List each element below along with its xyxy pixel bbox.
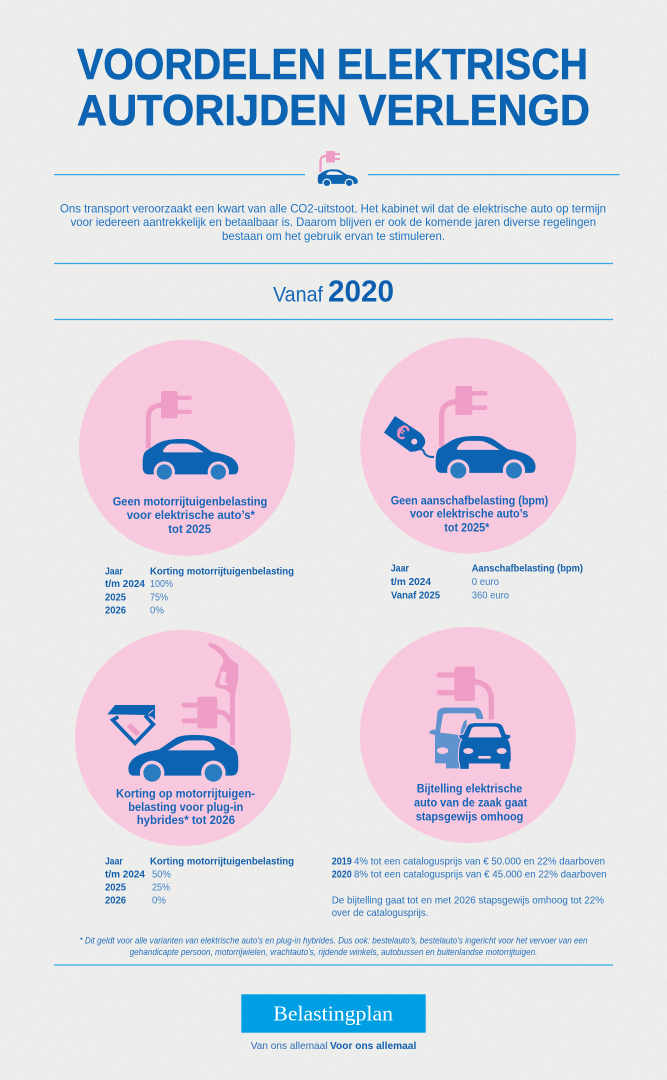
footnote [54, 935, 613, 965]
table: korting motorrijtuigenbelasting: 75% [150, 592, 168, 604]
table: korting motorrijtuigenbelasting [105, 565, 294, 616]
table: korting plug-in hybrides: t/m 2024 [105, 868, 145, 880]
icon: euro price tag [384, 416, 434, 457]
circle heading: Korting op motorrijtuigen- [116, 789, 255, 801]
circle heading: Bijtelling elektrische [417, 784, 522, 796]
intro text: Ons transport veroorzaakt een kwart van alle CO2-uitstoot. Het kabinet wil dat de elektrische auto op termijn [60, 202, 606, 216]
circle heading [113, 497, 267, 536]
circle heading [414, 784, 527, 824]
table: korting plug-in hybrides: 0% [152, 894, 166, 906]
table: korting motorrijtuigenbelasting: 100% [150, 578, 173, 590]
intro text: voor iedereen aantrekkelijk en betaalbaar is. Daarom blijven er ook de komende jaren diverse regelingen [71, 215, 596, 229]
header divider with icon [54, 151, 620, 187]
icon: plug and car [318, 151, 358, 187]
table: aanschafbelasting: Jaar [391, 563, 409, 575]
circle heading: voor elektrische auto’s* [127, 510, 256, 522]
button: Belastingplan [241, 994, 426, 1033]
circle heading: voor elektrische auto’s [410, 509, 528, 521]
icon: plug and electric car [143, 391, 238, 483]
circle heading [391, 495, 548, 535]
text: bijtelling per jaar: over de catalogusprijs. [332, 907, 428, 919]
title: AUTORIJDEN VERLENGD [77, 86, 590, 135]
section heading: Vanaf 2020: 2020 [328, 274, 394, 309]
table: aanschafbelasting: t/m 2024 [391, 576, 431, 588]
table: korting plug-in hybrides: 25% [152, 882, 170, 894]
text: bijtelling per jaar: 4% tot een catalogusprijs van € 50.000 en 22% daarboven [354, 855, 605, 867]
circle heading: tot 2025* [444, 523, 490, 535]
icon: car [436, 436, 536, 482]
table: aanschafbelasting: 360 euro [472, 589, 509, 601]
table: korting plug-in hybrides [105, 855, 294, 906]
circle background [360, 627, 576, 843]
icon: plug and two cars [429, 667, 512, 770]
table: korting plug-in hybrides: Jaar [105, 855, 123, 867]
section heading: Vanaf 2020 [54, 264, 613, 320]
table: aanschafbelasting: Vanaf 2025 [391, 589, 440, 601]
circle heading: stapsgewijs omhoog [416, 812, 523, 824]
table: korting plug-in hybrides: 50% [152, 868, 171, 880]
section heading: Vanaf 2020: Vanaf [273, 284, 323, 307]
circle heading: hybrides* tot 2026 [137, 815, 235, 827]
title [77, 40, 590, 135]
icon: fuel nozzle and plug [182, 642, 238, 745]
circle heading: Geen aanschafbelasting (bpm) [391, 495, 548, 507]
text: bijtelling per jaar [332, 855, 607, 919]
table: korting motorrijtuigenbelasting: t/m 2024 [105, 578, 145, 590]
table: korting motorrijtuigenbelasting: Jaar [105, 565, 123, 577]
panel: bijtelling [332, 627, 607, 919]
icon: euro price tag: € [391, 420, 414, 445]
table: korting motorrijtuigenbelasting: 0% [150, 604, 164, 616]
button: Belastingplan: Belastingplan [273, 1002, 394, 1026]
circle background [75, 630, 291, 846]
panel: aanschafbelasting [360, 338, 583, 601]
circle heading: tot 2025 [168, 524, 212, 536]
table: aanschafbelasting: Aanschafbelasting (bpm) [472, 563, 583, 575]
tagline [251, 1040, 416, 1052]
icon: car [128, 735, 238, 785]
table: korting motorrijtuigenbelasting: 2026 [105, 604, 126, 616]
circle background [79, 340, 295, 556]
intro text [60, 202, 606, 243]
circle heading: Geen motorrijtuigenbelasting [113, 497, 267, 509]
table: aanschafbelasting [391, 563, 583, 601]
text: bijtelling per jaar: 8% tot een catalogusprijs van € 45.000 en 22% daarboven [354, 868, 607, 880]
table: korting plug-in hybrides: 2025 [105, 882, 126, 894]
text: bijtelling per jaar: 2019 [332, 855, 352, 867]
table: korting motorrijtuigenbelasting: Korting motorrijtuigenbelasting [150, 565, 294, 577]
text: bijtelling per jaar: 2020 [332, 868, 352, 880]
icon: plug [442, 386, 487, 447]
table: korting plug-in hybrides: Korting motorrijtuigenbelasting [150, 855, 294, 867]
circle heading: belasting voor plug-in [128, 802, 243, 814]
table: aanschafbelasting: 0 euro [472, 576, 499, 588]
tagline: Voor ons allemaal [330, 1040, 416, 1052]
circle heading [116, 789, 255, 827]
icon: discount voucher [107, 705, 155, 743]
circle background [360, 338, 576, 554]
circle heading: auto van de zaak gaat [414, 798, 527, 810]
footnote: * Dit geldt voor alle varianten van elektrische auto’s en plug-in hybrides. Dus ook: bestelauto’s, bestelauto’s ingericht voor het vervoer van een [80, 935, 588, 946]
tagline: Van ons allemaal [251, 1040, 328, 1052]
table: korting motorrijtuigenbelasting: 2025 [105, 592, 126, 604]
footnote: gehandicapte persoon, motorrijwielen, vrachtauto’s, rijdende winkels, autobussen en buitenlandse motorrijtuigen. [130, 947, 537, 958]
text: bijtelling per jaar: De bijtelling gaat tot en met 2026 stapsgewijs omhoog tot 22% [332, 894, 604, 906]
panel: motorrijtuigenbelasting [79, 340, 295, 616]
title: VOORDELEN ELEKTRISCH [77, 40, 588, 89]
table: korting plug-in hybrides: 2026 [105, 894, 126, 906]
intro text: bestaan om het gebruik ervan te stimuleren. [222, 229, 445, 243]
panel: plug-in hybrides [75, 630, 294, 906]
